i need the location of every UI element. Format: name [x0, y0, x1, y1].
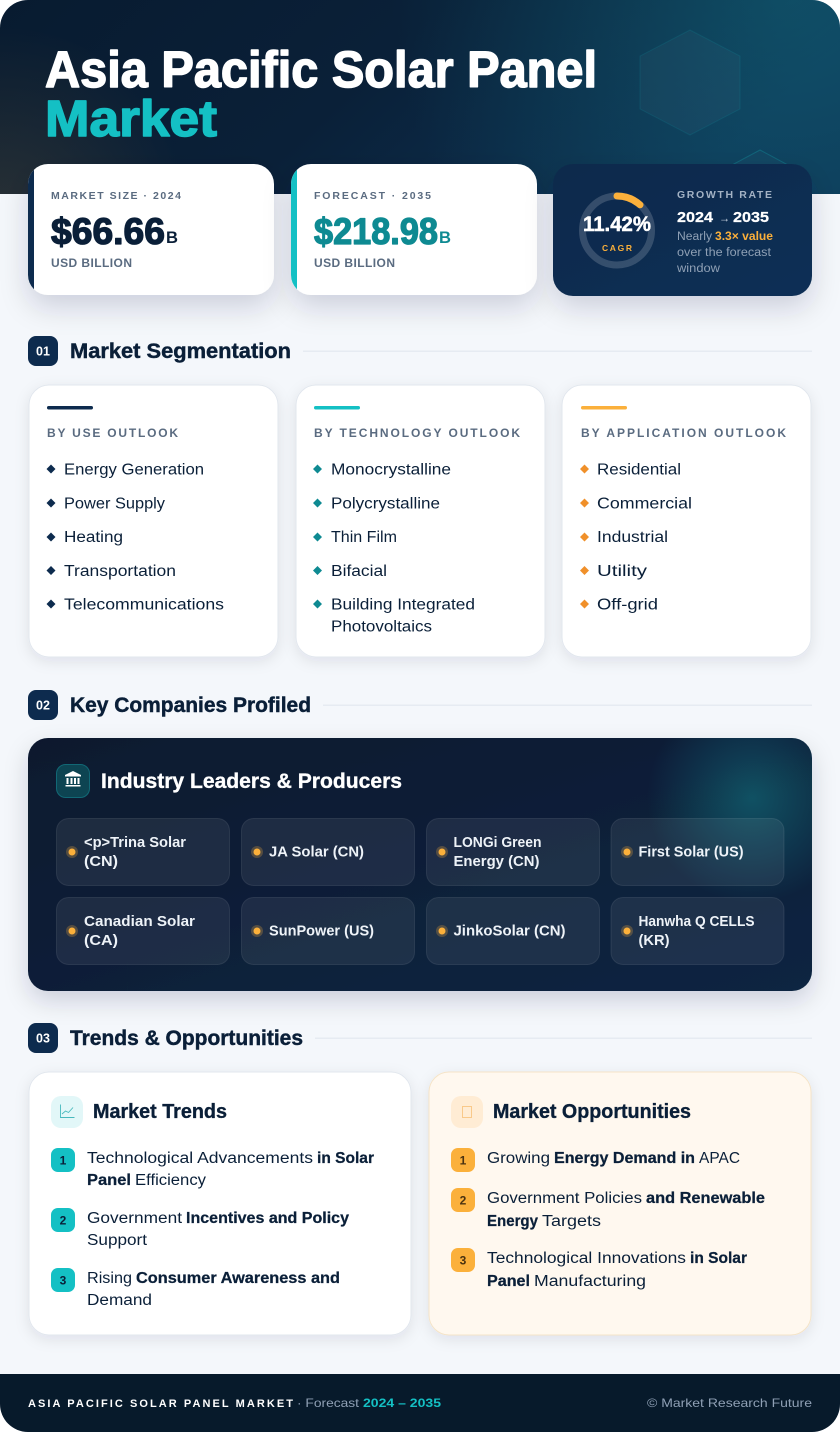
trend 1: 1	[60, 1154, 67, 1168]
panel: market opportunities: Market Opportunities	[493, 1101, 691, 1123]
list: technology items: Bifacial	[331, 563, 387, 580]
chip: Trina Solar: (CN)	[84, 854, 118, 870]
trend 3: Demand	[87, 1292, 152, 1309]
trend 1: in Solar	[317, 1150, 374, 1167]
section heading 01: Market Segmentation	[70, 340, 291, 363]
stat card: market size 2024	[28, 164, 274, 295]
section heading 03: 03	[36, 1032, 50, 1046]
panel: market opportunities	[429, 1072, 811, 1335]
chip: LONGi Green Energy: LONGi Green	[454, 835, 542, 851]
section heading 03	[28, 1023, 812, 1053]
list: use items: Telecommunications	[64, 596, 224, 614]
panel: industry leaders: Industry Leaders & Producers	[101, 770, 402, 793]
chip: Hanwha Q CELLS: Hanwha Q CELLS	[638, 914, 755, 930]
trend 3: Consumer Awareness and	[136, 1270, 340, 1287]
opportunity 3: Technological Innovations	[487, 1250, 686, 1267]
opportunity 3: Manufacturing	[534, 1273, 646, 1290]
opportunity 3: 3	[460, 1254, 467, 1268]
donut chart: CAGR: 11.42%	[583, 213, 651, 236]
icon: line chart	[51, 1096, 83, 1128]
trend 1: Efficiency	[135, 1172, 206, 1189]
growth rate text: 2024	[677, 209, 714, 226]
trend 3: Rising	[87, 1270, 132, 1287]
chip: JA Solar	[242, 818, 414, 886]
opportunity 2: Government Policies	[487, 1190, 642, 1207]
list: application items: Industrial	[597, 529, 668, 546]
list: application items: Off-grid	[597, 596, 658, 614]
stat card: forecast 2035: FORECAST · 2035	[314, 190, 431, 202]
opportunity 3: in Solar	[690, 1250, 747, 1267]
list: application items: Commercial	[597, 496, 692, 512]
list: technology items: Polycrystalline	[331, 496, 440, 512]
growth rate text: 3.3× value	[715, 231, 773, 243]
list: technology items: Thin Film	[331, 529, 397, 546]
title: Asia Pacific Solar Panel	[45, 41, 597, 98]
chip: Trina Solar: <p>Trina Solar	[84, 835, 186, 851]
opportunity 3: Panel	[487, 1273, 530, 1290]
opportunity 1: APAC	[699, 1150, 740, 1167]
opportunity 2: Targets	[542, 1213, 601, 1230]
list: technology items: Photovoltaics	[331, 618, 432, 636]
stat card: market size 2024: B	[166, 228, 178, 247]
section heading 01	[28, 336, 812, 366]
list: use items: Energy Generation	[64, 462, 204, 478]
decorative hexagon large	[640, 30, 740, 135]
list: application items: Residential	[597, 462, 681, 478]
list: application items	[580, 462, 692, 614]
growth rate text: over the forecast	[677, 247, 772, 259]
panel: industry leaders	[28, 738, 812, 991]
stat card: market size 2024: $66.66	[51, 211, 165, 252]
stat card: forecast 2035: B	[439, 228, 451, 247]
panel: market trends: Market Trends	[93, 1101, 227, 1123]
growth rate text	[676, 189, 773, 275]
header banner	[0, 0, 840, 194]
chip: Hanwha Q CELLS: (KR)	[638, 933, 670, 949]
trend 2: Government	[87, 1210, 183, 1227]
trend 1: Technological Advancements	[87, 1150, 313, 1167]
chip: SunPower	[242, 898, 414, 964]
opportunity 1: Growing	[487, 1150, 550, 1167]
stat card: market size 2024: MARKET SIZE · 2024	[51, 190, 181, 202]
growth rate text: 2035	[733, 209, 769, 226]
section heading 03: Trends & Opportunities	[70, 1027, 303, 1050]
panel: by use outlook	[29, 385, 278, 657]
stat card: forecast 2035: USD BILLION	[314, 256, 395, 270]
growth rate text: window	[676, 263, 721, 275]
chip: First Solar	[611, 818, 784, 886]
list: use items	[46, 462, 224, 614]
stat card: growth rate	[553, 164, 812, 296]
list: use items: Power Supply	[64, 496, 165, 512]
chip: LONGi Green Energy: Energy (CN)	[454, 854, 540, 870]
chip: Trina Solar	[56, 818, 230, 886]
stat card: market size 2024: USD BILLION	[51, 256, 132, 270]
chip: First Solar: First Solar (US)	[638, 844, 744, 860]
opportunity 2: 2	[460, 1194, 467, 1208]
stat card: forecast 2035: $218.98	[314, 211, 438, 252]
chip: Canadian Solar: (CA)	[84, 933, 118, 949]
footer: · Forecast	[297, 1396, 360, 1410]
title: Market	[45, 90, 217, 147]
trend 1: Panel	[87, 1172, 131, 1189]
panel: by use outlook: BY USE OUTLOOK	[47, 426, 178, 440]
opportunity 2: Energy	[487, 1213, 538, 1230]
growth rate text: GROWTH RATE	[677, 189, 772, 201]
chip: Canadian Solar	[56, 898, 230, 964]
trend 2	[51, 1208, 349, 1249]
decorative hexagon small	[733, 150, 787, 164]
section heading 01: 01	[36, 344, 50, 358]
stat card: forecast 2035	[291, 164, 537, 295]
panel: by application outlook: BY APPLICATION OUTLOOK	[581, 426, 786, 440]
footer	[0, 1374, 840, 1432]
footer: ASIA PACIFIC SOLAR PANEL MARKET	[28, 1398, 293, 1410]
growth rate text: Nearly	[677, 231, 712, 243]
panel: by technology outlook: BY TECHNOLOGY OUTLOOK	[314, 426, 520, 440]
chip: LONGi Green Energy	[426, 818, 600, 886]
chip: SunPower: SunPower (US)	[269, 924, 374, 940]
chip: JinkoSolar	[426, 898, 600, 964]
donut chart: CAGR: CAGR	[602, 243, 632, 253]
trend 2: Incentives and Policy	[186, 1210, 349, 1227]
list: technology items: Monocrystalline	[331, 462, 451, 478]
growth rate text: →	[719, 211, 730, 225]
section heading 02: Key Companies Profiled	[70, 694, 311, 717]
chip: Hanwha Q CELLS	[611, 898, 784, 964]
footer: © Market Research Future	[647, 1396, 812, 1410]
list: use items: Heating	[64, 529, 123, 546]
opportunity 2: and Renewable	[646, 1190, 765, 1207]
trend 3: 3	[60, 1274, 67, 1288]
list: technology items	[313, 462, 475, 636]
trend 3	[51, 1268, 339, 1305]
icon: bank building	[56, 764, 90, 798]
list: application items: Utility	[597, 563, 647, 580]
donut chart: CAGR	[582, 196, 652, 265]
list: use items: Transportation	[64, 563, 176, 580]
footer: 2024 – 2035	[363, 1396, 441, 1410]
trend 2: 2	[60, 1214, 67, 1228]
icon: missing glyph box	[451, 1096, 483, 1128]
opportunity 3	[451, 1248, 747, 1290]
chip: Canadian Solar: Canadian Solar	[84, 914, 195, 930]
panel: by technology outlook	[296, 385, 545, 657]
panel: by application outlook	[562, 385, 811, 657]
section heading 02	[28, 690, 812, 720]
section heading 02: 02	[36, 698, 50, 712]
trend 1	[51, 1148, 374, 1189]
panel: market trends	[29, 1072, 411, 1335]
trend 2: Support	[87, 1232, 148, 1249]
chip: JA Solar: JA Solar (CN)	[269, 844, 364, 860]
opportunity 1	[451, 1148, 740, 1172]
list: technology items: Building Integrated	[331, 596, 475, 614]
opportunity 1: Energy Demand in	[554, 1150, 695, 1167]
title	[46, 49, 594, 138]
opportunity 1: 1	[460, 1154, 467, 1168]
opportunity 2	[451, 1188, 765, 1230]
chip: JinkoSolar: JinkoSolar (CN)	[454, 924, 566, 940]
